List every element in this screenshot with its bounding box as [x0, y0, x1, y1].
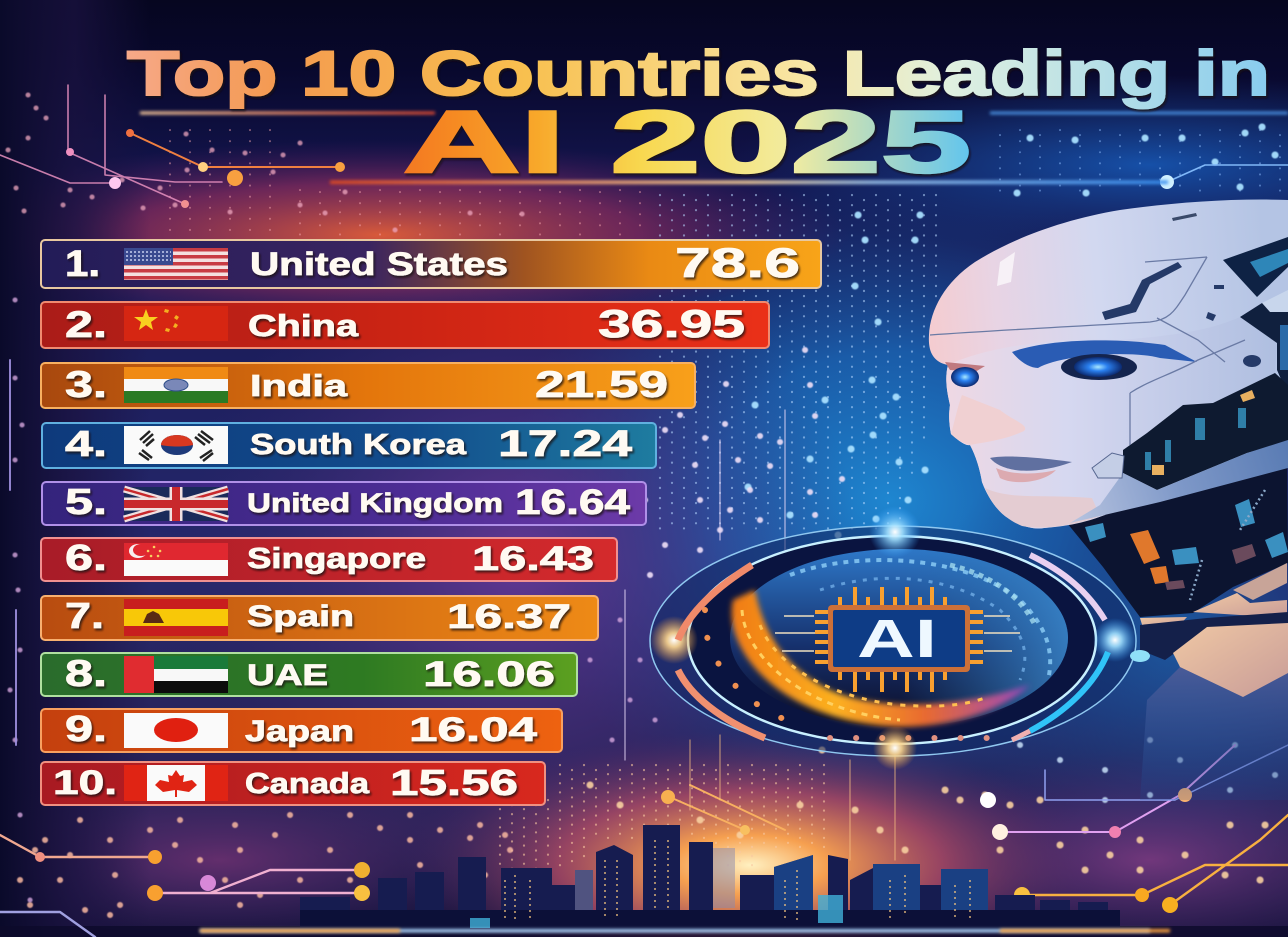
- robot jaw hex: [1092, 453, 1124, 478]
- row 10: Canada: Canada: [245, 768, 370, 800]
- row 4: South Korea: 17.24: [498, 423, 633, 464]
- title line 2: AI 2025: [403, 92, 971, 191]
- row 10: Canada: [41, 762, 545, 805]
- row 5: United Kingdom: United Kingdom: [247, 488, 503, 518]
- robot face plate: [946, 317, 1277, 529]
- row 8: UAE: 16.06: [423, 655, 555, 694]
- robot nose: [951, 395, 1025, 445]
- flag: India: [124, 367, 228, 403]
- robot lips: [990, 457, 1072, 471]
- row 7: Spain: 16.37: [447, 598, 571, 636]
- robot left eye: [945, 362, 985, 372]
- row 6: Singapore: 16.43: [472, 540, 594, 578]
- row 3: India: 21.59: [535, 364, 668, 405]
- robot body: [1140, 660, 1288, 800]
- row 10: Canada: 10.: [53, 764, 117, 802]
- row 9: Japan: Japan: [245, 715, 354, 748]
- row 4: South Korea: 4.: [65, 423, 107, 464]
- robot jaw plate: [1070, 440, 1288, 523]
- row 2: China: 36.95: [598, 303, 745, 346]
- robot upper-right gap: [1223, 237, 1288, 297]
- robot temple marks: [1102, 262, 1224, 321]
- city skyline: [200, 825, 1170, 932]
- row 8: UAE: [41, 653, 577, 696]
- title underline strokes: [140, 112, 1288, 184]
- row 1: United States: United States: [250, 246, 508, 282]
- robot figure: [929, 200, 1288, 800]
- flag: United States: [124, 248, 228, 280]
- inner disc: [688, 536, 1096, 744]
- row 1: United States: 1.: [65, 243, 100, 284]
- row 3: India: 3.: [65, 364, 107, 405]
- robot right eye: [1061, 354, 1137, 380]
- ranking bars: [41, 239, 821, 805]
- robot cheek mechanics: [1123, 373, 1288, 490]
- row 5: United Kingdom: 16.64: [515, 483, 631, 522]
- flag: South Korea: [124, 426, 228, 464]
- robot chin: [985, 488, 1100, 528]
- row 6: Singapore: Singapore: [247, 543, 426, 575]
- flag: UAE: [124, 656, 228, 693]
- row 10: Canada: 15.56: [390, 762, 518, 803]
- globe: [730, 549, 1068, 727]
- row 3: India: India: [250, 368, 348, 403]
- flag: United Kingdom: [124, 487, 228, 521]
- robot neck mechanics: [1067, 460, 1288, 617]
- AI globe emblem: [650, 506, 1150, 770]
- row 7: Spain: [41, 595, 598, 640]
- robot shoulder: [1233, 563, 1287, 600]
- row 2: China: [41, 302, 769, 348]
- chip: [775, 587, 1020, 692]
- flag: China: [124, 306, 228, 341]
- ring arc highlights: [678, 565, 752, 640]
- flag: Singapore: [124, 543, 228, 576]
- row 5: United Kingdom: [42, 481, 646, 525]
- row 1: United States: [41, 239, 821, 288]
- title line 1: Top 10 Countries Leading in: [127, 39, 1270, 109]
- row 2: China: 2.: [65, 304, 107, 345]
- robot small side panel: [1262, 290, 1288, 312]
- row 8: UAE: 8.: [65, 653, 107, 694]
- flag: Japan: [124, 713, 228, 748]
- row 2: China: China: [248, 308, 359, 343]
- row 9: Japan: 9.: [65, 708, 107, 749]
- left ring dots: [705, 610, 800, 725]
- row 8: UAE: UAE: [247, 659, 328, 692]
- row 9: Japan: [41, 708, 562, 752]
- row 4: South Korea: South Korea: [250, 429, 467, 461]
- row 1: United States: 78.6: [675, 239, 800, 286]
- row 7: Spain: Spain: [247, 600, 354, 633]
- row 4: South Korea: [42, 423, 656, 468]
- robot rear mechanics: [1240, 303, 1288, 395]
- title: [127, 39, 1270, 191]
- robot seams: [930, 257, 1245, 445]
- ring sparkles: [869, 506, 921, 558]
- row 6: Singapore: 6.: [65, 537, 107, 578]
- flag: Spain: [124, 599, 228, 636]
- robot head: [929, 200, 1288, 529]
- outer ring: [650, 526, 1136, 756]
- robot brow shade: [1012, 340, 1197, 368]
- chip label: AI: [857, 609, 937, 669]
- row 7: Spain: 7.: [65, 595, 104, 636]
- row 5: United Kingdom: 5.: [65, 481, 107, 522]
- flag: Canada: [124, 765, 228, 801]
- row 9: Japan: 16.04: [409, 711, 537, 749]
- row 6: Singapore: [41, 537, 617, 581]
- row 3: India: [41, 363, 695, 408]
